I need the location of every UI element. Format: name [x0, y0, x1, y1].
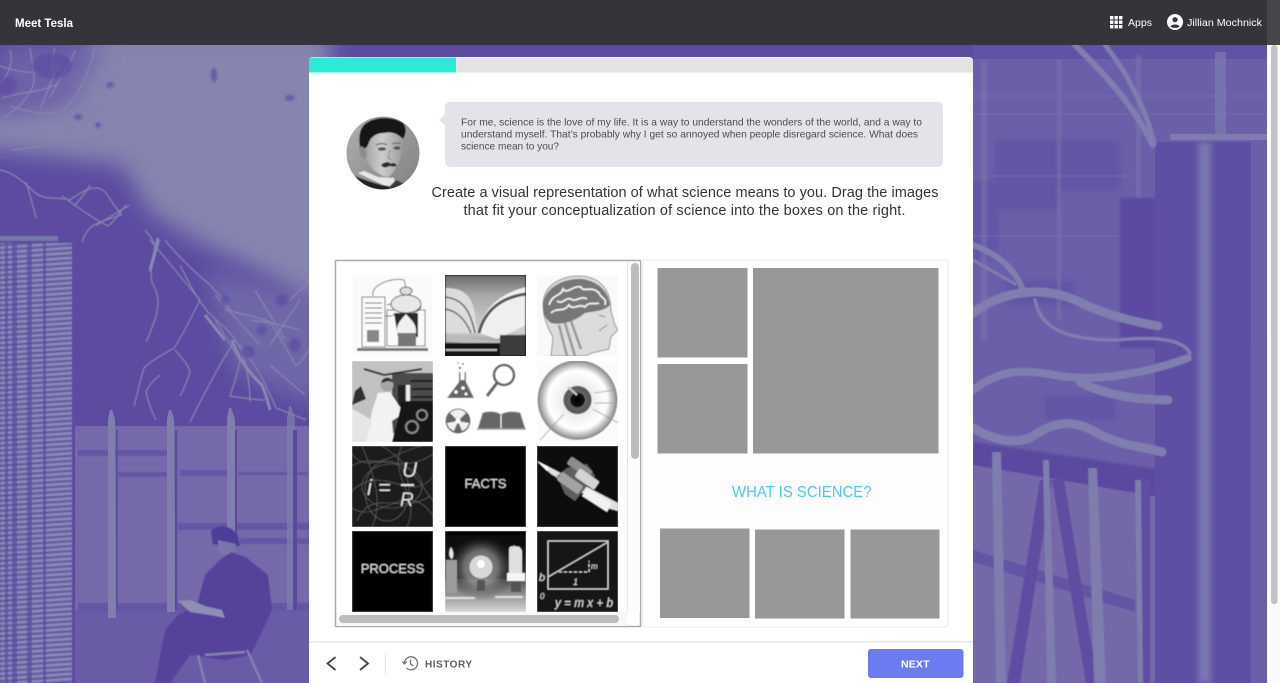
drop box: large [753, 268, 938, 454]
image: eyeball [537, 360, 618, 442]
image: FACTS tile [445, 446, 526, 527]
magnifier [494, 365, 514, 385]
seated Tesla silhouette reading [155, 526, 272, 683]
graph labels: 0 [540, 592, 545, 601]
icon: next arrow [360, 657, 368, 670]
footer toolbar [309, 641, 973, 678]
icon: history clock [402, 657, 417, 670]
icon: previous arrow [328, 657, 336, 670]
speech bubble [439, 102, 943, 167]
apps label: Apps [1128, 17, 1152, 29]
panel: collage drop zones [642, 260, 948, 627]
right wooden wall [973, 52, 1267, 468]
drop box: middle left [658, 364, 748, 454]
image: light bulbs [445, 531, 526, 612]
discharge wires [973, 45, 1190, 452]
image: scientist in lab coat [352, 361, 433, 442]
drop box: bottom left [660, 528, 750, 618]
icon: user account [1167, 14, 1183, 30]
image: brain anatomy head [537, 275, 618, 356]
bubble text: For me, science is the love of my life. It is a way to understand the wonders of the world, and a way to [461, 118, 922, 128]
image: chalk equation: U [402, 459, 418, 482]
left wooden fence [75, 406, 310, 683]
graph labels: y = m x + b [554, 596, 613, 610]
drop box: bottom middle [755, 530, 844, 618]
next button [868, 649, 964, 678]
instructions: that fit your conceptualization of science into the boxes on the right. [464, 203, 906, 219]
app title: Meet Tesla [15, 18, 74, 30]
image: science icons [445, 362, 526, 434]
top app bar [0, 0, 1280, 45]
instructions: Create a visual representation of what science means to you. Drag the images [432, 185, 938, 201]
instructions [432, 185, 938, 219]
horizontal scrollbar [339, 615, 619, 623]
Tesla portrait avatar [346, 116, 420, 190]
drop box: bottom right [850, 530, 940, 618]
image: PROCESS tile: PROCESS [361, 561, 425, 576]
lightning bloom [0, 30, 330, 422]
left Tesla coil [0, 236, 72, 683]
next button: NEXT [901, 658, 930, 670]
right fence [973, 452, 1165, 683]
image: rocket launching [537, 446, 618, 527]
bubble text [461, 118, 922, 152]
graph labels: b [539, 572, 545, 584]
graph labels [539, 562, 613, 610]
bubble text: understand myself. That’s probably why I get so annoyed when people disregard science. What does [461, 130, 918, 140]
open book icon [478, 412, 525, 429]
radiation symbol [446, 408, 470, 434]
image: chalk equation [352, 446, 433, 527]
progress bar [309, 58, 973, 72]
collage title: WHAT IS SCIENCE? [732, 484, 872, 501]
graph labels: m [591, 562, 598, 571]
activity card [309, 57, 973, 683]
history label: HISTORY [425, 660, 472, 670]
graph labels: 1 [573, 577, 578, 587]
bubble text: science mean to you? [461, 142, 559, 152]
image: linear equation chalkboard [537, 531, 618, 612]
user name: Jillian Mochnick [1187, 17, 1263, 29]
panel: image bank [336, 260, 640, 626]
equation: i = [367, 475, 391, 500]
image: distillation apparatus [356, 278, 429, 352]
drop box: top left [658, 268, 748, 358]
image: FACTS tile: FACTS [465, 476, 507, 491]
right Tesla coil [1155, 134, 1270, 683]
image: chalk equation: R [400, 490, 414, 511]
flask [447, 372, 474, 398]
icon: apps grid [1110, 16, 1122, 28]
image: PROCESS tile [352, 531, 433, 612]
page scrollbar [1267, 45, 1280, 683]
vertical scrollbar [631, 263, 639, 459]
image: open book [445, 275, 526, 356]
